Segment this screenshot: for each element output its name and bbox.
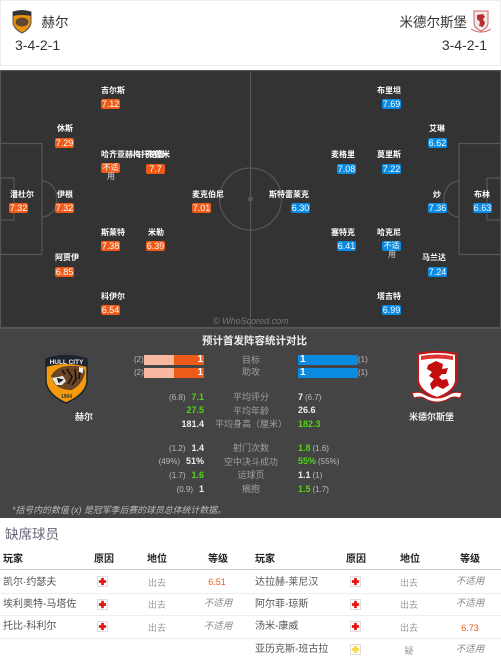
home stat values: 27.5 [186, 405, 204, 415]
away bar [298, 355, 358, 365]
row 3: 出去 [400, 623, 418, 633]
row 3 [0, 616, 501, 639]
row 2: 不适用 [456, 598, 484, 609]
player: 塔吉特 [377, 292, 401, 315]
player: 斯特雷莱克 [269, 190, 310, 213]
player: 莫里斯: 7.22 [383, 164, 400, 174]
away stat values: 7(6.7) [298, 392, 321, 402]
row 2: 出去 [400, 600, 418, 610]
stat labels: 摘抱 [242, 484, 260, 494]
panel: pitch [0, 70, 501, 328]
player: 炒: 炒 [433, 190, 441, 199]
row 3: 汤米-康威 [255, 621, 298, 632]
stat labels: 空中决斗成功 [224, 457, 278, 467]
row 4: 不适用 [456, 644, 484, 655]
away stat values: 1.5(1.7) [298, 484, 329, 494]
player: 巴克米 [146, 150, 170, 174]
home prior: (2) [134, 368, 144, 377]
stat labels: 平均身高（厘米） [215, 419, 287, 429]
away team name: 米德尔斯堡 [400, 15, 467, 30]
row 3: 6.73 [461, 623, 479, 633]
row 4: 亚历克斯-班古拉 [255, 644, 328, 655]
player: 布林: 6.63 [474, 203, 491, 213]
row 2: 出去 [148, 600, 166, 610]
row 4 [255, 643, 485, 656]
player: 斯特雷莱克: 6.30 [292, 203, 309, 213]
player: 麦格里: 7.08 [338, 164, 355, 174]
home team name: 赫尔 [42, 15, 68, 30]
stat labels: 目标 [242, 355, 260, 365]
player: 科伊尔 [101, 292, 125, 315]
panel: stats comparison [0, 327, 501, 518]
player: 伊根 [55, 190, 74, 213]
player: 米勒 [146, 228, 165, 251]
home stat values: (6.8) 7.1 [169, 392, 204, 402]
bar: goals [134, 354, 204, 365]
table header: 玩家 [255, 554, 275, 565]
player: 布里坦 [377, 86, 401, 109]
player: 潘杜尔: 7.32 [10, 203, 27, 213]
player: 哈克尼 [377, 228, 401, 259]
home stat values: (1.2) 1.4 [169, 443, 204, 453]
row 3: 出去 [148, 623, 166, 633]
table header: 玩家 [3, 554, 23, 565]
row 1: 不适用 [456, 576, 484, 587]
heading: 缺席球员 [5, 527, 59, 542]
icon: Hull crest small [12, 10, 32, 34]
row 2: 埃利奥特-马塔佐 [3, 599, 76, 610]
stat labels: 运球页 [237, 470, 264, 480]
away stat values: 182.3 [298, 419, 321, 429]
player: 休斯: 7.29 [56, 138, 73, 148]
home formation: 3-4-2-1 [15, 37, 60, 53]
player: 巴克米: 7.7 [149, 164, 162, 174]
home stat values [159, 392, 204, 494]
player: 艾琳: 艾琳 [429, 124, 445, 133]
row 1: 6.51 [208, 577, 226, 587]
row 2 [0, 594, 501, 616]
player: 马兰达: 马兰达 [422, 253, 446, 262]
player: 塔吉特: 塔吉特 [377, 292, 401, 301]
player: 斯莱特: 斯莱特 [101, 228, 125, 237]
bar: away assists [298, 367, 368, 378]
table header: 地位 [147, 554, 167, 565]
row 1: 出去 [148, 578, 166, 588]
table header: 地位 [400, 554, 420, 565]
away stat values: 1.1(1) [298, 470, 322, 480]
row 1: 凯尔·约瑟夫 [3, 577, 56, 588]
player: 塞特克: 塞特克 [331, 228, 355, 237]
icon: Hull crest large: 1904 [61, 394, 72, 400]
table header: 原因 [94, 554, 114, 565]
player: 哈克尼: 用 [388, 250, 396, 259]
home stat values: (0.9) 1 [177, 484, 204, 494]
player: 阿贾伊: 6.85 [56, 267, 73, 277]
player: 布林 [473, 190, 492, 213]
away formation: 3-4-2-1 [442, 37, 487, 53]
player: 休斯 [55, 124, 74, 148]
stat labels [215, 355, 287, 494]
player: 斯特雷莱克: 斯特雷莱克 [269, 190, 309, 199]
icon: Middlesbrough crest small [471, 10, 491, 32]
row 1: 达拉赫-莱尼汉 [255, 577, 318, 588]
header: match teams [0, 0, 501, 66]
home label: 赫尔 [75, 412, 93, 422]
home stat values: 181.4 [181, 419, 204, 429]
row 3: 不适用 [204, 621, 232, 632]
home bars: 1 [197, 354, 203, 365]
player: 伊根: 伊根 [57, 190, 73, 199]
away stat values: 1.8(1.6) [298, 443, 329, 453]
row 3: 托比-科利尔 [3, 621, 56, 632]
player: 莫里斯: 莫里斯 [377, 150, 401, 159]
away players [269, 86, 492, 315]
player: 莫里斯 [377, 150, 401, 174]
home bars: 1 [197, 367, 203, 378]
stat labels: 平均评分 [233, 392, 269, 402]
away bar: 1 [300, 354, 306, 365]
player: 艾琳: 6.62 [429, 138, 446, 148]
away bar: 1 [300, 367, 306, 378]
player: 伊根: 7.32 [56, 203, 73, 213]
away stat values: 26.6 [298, 405, 316, 415]
home bars [144, 355, 204, 365]
player: 阿贾伊 [55, 253, 79, 277]
away prior: (1) [358, 355, 368, 364]
player: 炒 [428, 190, 447, 213]
bar: assists [134, 367, 204, 378]
home stat values: (49%) 51% [159, 456, 204, 466]
player: 炒: 7.36 [429, 203, 446, 213]
player: 麦克伯尼: 7.01 [193, 203, 210, 213]
table header [0, 548, 501, 570]
player: 麦克伯尼: 麦克伯尼 [192, 190, 224, 199]
player: 吉尔斯: 7.12 [102, 99, 119, 109]
player: 哈克尼: 不适 [384, 241, 400, 250]
player: 布里坦: 布里坦 [377, 86, 401, 95]
away stat values [298, 392, 339, 494]
player: 布林: 布林 [474, 190, 490, 199]
pitch markings [0, 70, 501, 327]
player: 塞特克 [331, 228, 356, 251]
player: 麦格里 [331, 150, 356, 174]
stats title: 预计首发阵容统计对比 [202, 335, 307, 347]
away label: 米德尔斯堡 [409, 412, 454, 422]
stat labels: 平均年龄 [233, 406, 269, 416]
player: 米勒: 米勒 [148, 228, 164, 237]
player: 吉尔斯: 吉尔斯 [101, 86, 125, 95]
player: 哈齐亚赫梅托格鲁: 用 [107, 172, 115, 181]
player: 塔吉特: 6.99 [383, 305, 400, 315]
player: 哈克尼: 哈克尼 [377, 228, 401, 237]
home players [9, 86, 224, 315]
row 2: 不适用 [204, 598, 232, 609]
table header: 等级 [460, 554, 480, 565]
row 1 [0, 570, 501, 594]
player: 吉尔斯 [101, 86, 125, 109]
player: 潘杜尔: 潘杜尔 [10, 190, 34, 199]
player: 潘杜尔 [9, 190, 34, 213]
bar: away goals [298, 354, 368, 365]
player: 塞特克: 6.41 [338, 241, 355, 251]
player: 麦格里: 麦格里 [331, 150, 355, 159]
player: 阿贾伊: 阿贾伊 [55, 253, 79, 262]
row 1: 出去 [400, 578, 418, 588]
home stat values: (1.7) 1.6 [169, 470, 204, 480]
away stat values: 55%(55%) [298, 456, 339, 466]
player: 科伊尔: 科伊尔 [101, 292, 125, 301]
icon: Middlesbrough crest large [411, 351, 463, 402]
table header: 等级 [208, 554, 228, 565]
player: 斯莱特: 7.38 [102, 241, 119, 251]
home bars [144, 368, 204, 378]
player: 休斯: 休斯 [57, 124, 73, 133]
row 4: 疑 [404, 646, 414, 656]
player: 斯莱特 [101, 228, 125, 251]
player: 科伊尔: 6.54 [102, 305, 119, 315]
player: 米勒: 6.39 [147, 241, 164, 251]
icon: Hull crest large: HULL CITY [50, 359, 84, 366]
player: 布里坦: 7.69 [383, 99, 400, 109]
player: 麦克伯尼 [192, 190, 224, 213]
player: 哈齐亚赫梅托格鲁: 哈齐亚赫梅托格鲁 [101, 150, 165, 159]
away bar [298, 368, 358, 378]
player: 马兰达 [422, 253, 447, 277]
away prior: (1) [358, 368, 368, 377]
player: 巴克米: 布鲁米 [146, 150, 170, 159]
home prior: (2) [134, 355, 144, 364]
watermark: © WhoScored.com [213, 316, 289, 326]
stat labels: 助攻 [242, 367, 260, 377]
panel: missing players [0, 518, 501, 666]
row 2: 阿尔菲-琼斯 [255, 599, 308, 610]
stat labels: 射门次数 [233, 443, 269, 453]
icon: Hull crest large [45, 354, 88, 404]
player: 艾琳 [428, 124, 447, 148]
table header: 原因 [346, 554, 366, 565]
player: 哈齐亚赫梅托格鲁: 不适 [102, 163, 118, 172]
player: 马兰达: 7.24 [429, 267, 446, 277]
player: 哈齐亚赫梅托格鲁 [101, 150, 165, 181]
footnote: *括号内的数值 (x) 是冠军季后赛的球员总体统计数据。 [12, 505, 226, 515]
